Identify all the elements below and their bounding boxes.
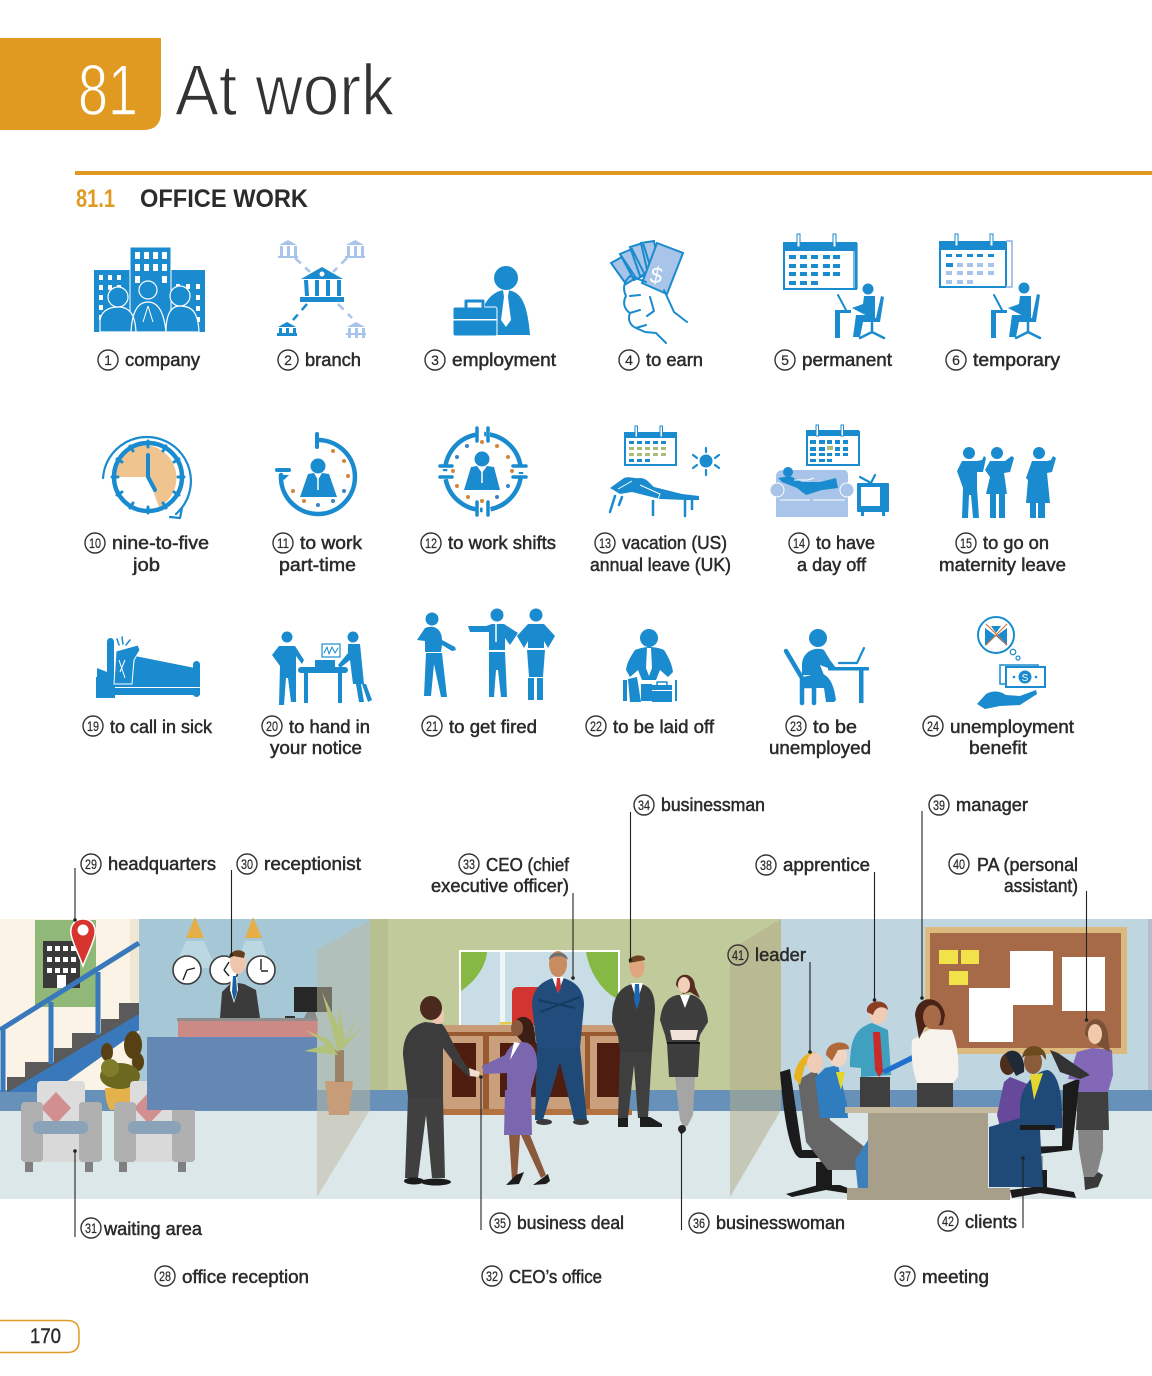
chapter number tab: 81 [78, 51, 138, 131]
label: to get fired: 21 [426, 718, 438, 734]
label: leader: 41 [732, 947, 744, 963]
label: branch [278, 350, 361, 370]
label: vacation annual leave: 13 [599, 535, 611, 551]
page number tab [0, 1320, 79, 1352]
glass partition left [317, 920, 370, 1197]
label: leader [728, 945, 806, 965]
staircase [0, 943, 139, 1092]
label: vacation annual leave: annual leave (UK) [590, 555, 731, 575]
business deal handshake woman [482, 1017, 550, 1185]
icon: branch [277, 240, 366, 338]
page number tab: 170 [30, 1325, 61, 1348]
label: to be unemployed: 23 [790, 718, 802, 734]
label: branch: 2 [284, 352, 292, 368]
leader lines [73, 811, 1088, 1237]
label: PA: 40 [953, 856, 965, 872]
armchair right [114, 1081, 195, 1172]
label: to earn: to earn [646, 350, 703, 370]
label: company: 1 [104, 352, 112, 368]
label: to have a day off: to have [816, 533, 875, 553]
label: to work part-time: to work [300, 533, 363, 553]
man in blue jacket [815, 1043, 849, 1118]
icon: to call in sick [96, 637, 200, 698]
icon: nine-to-five job clock [103, 437, 191, 518]
label: businesswoman: businesswoman [716, 1213, 845, 1233]
label: office reception: office reception [182, 1267, 309, 1287]
label: nine-to-five job: 10 [89, 535, 101, 551]
chapter number tab [0, 38, 161, 131]
label: unemployment benefit: benefit [969, 738, 1027, 758]
icon: to be laid off [623, 629, 677, 702]
icon: maternity leave [957, 447, 1056, 518]
label: unemployment benefit: unemployment [950, 717, 1074, 737]
label: receptionist: receptionist [264, 854, 361, 874]
label: clients: 42 [942, 1213, 954, 1229]
label: to be unemployed: to be [813, 717, 857, 737]
label: to be unemployed [769, 716, 871, 758]
CEO window [459, 950, 620, 1026]
label: branch: branch [305, 350, 361, 370]
CEO desk and chair [440, 987, 632, 1115]
meeting table [845, 1107, 1013, 1200]
notice board [925, 927, 1127, 1054]
label: manager: 39 [933, 797, 945, 813]
label: clients: clients [965, 1212, 1017, 1232]
label: to earn [619, 350, 703, 370]
label: meeting: 37 [899, 1268, 911, 1284]
label: PA: assistant) [1004, 876, 1078, 896]
label: to call in sick: 19 [87, 718, 99, 734]
icon: to earn: $ [649, 263, 663, 288]
label: CEO: 33 [463, 856, 475, 872]
label: unemployment benefit: 24 [927, 718, 939, 734]
label: company: company [125, 350, 200, 370]
wall sign with building and location pin [35, 919, 96, 1007]
label: meeting: meeting [922, 1267, 989, 1287]
icon: to work shifts [439, 428, 526, 515]
label: to hand in your notice: 20 [266, 718, 278, 734]
leader chair [780, 1069, 858, 1197]
panel: scene labels [81, 795, 1078, 1287]
label: headquarters: headquarters [108, 854, 216, 874]
glass partition right [730, 919, 781, 1197]
businesswoman figure [660, 975, 708, 1133]
icon: vacation [610, 426, 719, 516]
wall clocks [173, 956, 275, 984]
icon: to hand in your notice [272, 632, 372, 705]
client man figure and chair [989, 1046, 1080, 1198]
section heading: 81.1 [76, 185, 115, 213]
label: nine-to-five job: nine-to-five [112, 533, 209, 553]
icon: to get fired [417, 608, 555, 700]
icon: to have a day off [770, 425, 889, 517]
label: leader: leader [755, 945, 806, 965]
businessman figure [612, 955, 662, 1127]
label: CEO [431, 854, 570, 896]
label: CEO: executive officer) [431, 876, 569, 896]
receptionist figure [220, 950, 260, 1018]
icon: to earn [611, 241, 687, 343]
label: receptionist: 30 [241, 856, 253, 872]
label: to go on maternity leave: maternity leave [939, 555, 1066, 575]
icon: to be unemployed [786, 629, 869, 703]
label: waiting area: waiting area [103, 1219, 203, 1239]
label: vacation annual leave: vacation (US) [622, 533, 727, 553]
label: unemployment benefit [923, 716, 1074, 758]
label: permanent: 5 [781, 352, 789, 368]
label: to go on maternity leave: 15 [960, 535, 972, 551]
label: to hand in your notice: your notice [270, 738, 362, 758]
label: to work part-time [273, 533, 363, 575]
label: PA: PA (personal [977, 855, 1078, 875]
label: apprentice: 38 [760, 857, 772, 873]
apprentice figure [850, 1002, 914, 1107]
label: business deal: business deal [517, 1213, 624, 1233]
client woman figure [997, 1051, 1030, 1127]
section heading [75, 171, 1152, 213]
wall lamps [174, 917, 270, 968]
illustration: office scene [0, 917, 1152, 1200]
icon: to work part-time [277, 434, 355, 514]
label: to earn: 4 [625, 352, 633, 368]
label: businesswoman: 36 [693, 1215, 705, 1231]
label: to hand in your notice: to hand in [289, 717, 370, 737]
potted palm [304, 992, 364, 1115]
icon: permanent [783, 234, 884, 338]
panel: vocabulary row 1 [94, 234, 1060, 370]
title: At work [175, 51, 395, 131]
label: to be unemployed: unemployed [769, 738, 871, 758]
label: to get fired: to get fired [449, 717, 537, 737]
label: to call in sick: to call in sick [110, 717, 213, 737]
label: to work part-time: 11 [277, 535, 289, 551]
icon: company [94, 247, 205, 332]
label: waiting area: 31 [85, 1220, 97, 1236]
label: employment: 3 [431, 352, 439, 368]
label: business deal: 35 [494, 1215, 506, 1231]
label: permanent: permanent [802, 350, 892, 370]
label: temporary: 6 [952, 352, 960, 368]
label: to hand in your notice [262, 716, 370, 758]
armchair left [21, 1081, 102, 1172]
business deal handshake man [403, 996, 480, 1186]
label: PA [949, 854, 1078, 896]
label: to go on maternity leave: to go on [983, 533, 1049, 553]
icon: unemployment benefit [977, 617, 1045, 709]
label: CEO: CEO (chief [486, 855, 570, 875]
label: to work shifts: 12 [425, 535, 437, 551]
label: temporary: temporary [973, 350, 1060, 370]
label: nine-to-five job [85, 533, 209, 575]
label: CEO's office: 32 [486, 1268, 498, 1284]
label: headquarters: 29 [85, 856, 97, 872]
label: apprentice: apprentice [783, 855, 870, 875]
label: manager: manager [956, 795, 1028, 815]
label: clients [938, 1211, 1017, 1232]
label: meeting [895, 1266, 989, 1287]
manager figure [912, 999, 958, 1107]
label: to go on maternity leave [939, 533, 1066, 575]
label: to be laid off: to be laid off [613, 717, 715, 737]
label: businessman: 34 [638, 797, 650, 813]
label: CEO's office: CEO’s office [509, 1267, 602, 1287]
label: employment: employment [452, 350, 556, 370]
leader figure [794, 1052, 868, 1190]
label: vacation annual leave [590, 533, 731, 575]
panel: vocabulary row 2 [85, 425, 1066, 575]
panel: vocabulary row 3 [83, 608, 1074, 758]
label: to have a day off: a day off [797, 555, 867, 575]
label: to work part-time: part-time [279, 555, 356, 575]
label: to have a day off [789, 533, 875, 575]
CEO figure [532, 951, 589, 1125]
room backgrounds [0, 919, 1152, 1199]
PA figure [1050, 1019, 1113, 1190]
label: businessman: businessman [661, 795, 765, 815]
waiting area plant [100, 1031, 144, 1110]
reception desk [147, 987, 332, 1110]
icon: temporary [939, 234, 1040, 338]
label: to have a day off: 14 [793, 535, 805, 551]
label: office reception: 28 [159, 1268, 171, 1284]
icon: unemployment benefit: S [1022, 673, 1029, 684]
icon: employment [453, 266, 530, 336]
label: to be laid off: 22 [590, 718, 602, 734]
section heading: OFFICE WORK [140, 185, 308, 213]
label: nine-to-five job: job [132, 555, 160, 575]
label: to work shifts: to work shifts [448, 533, 556, 553]
